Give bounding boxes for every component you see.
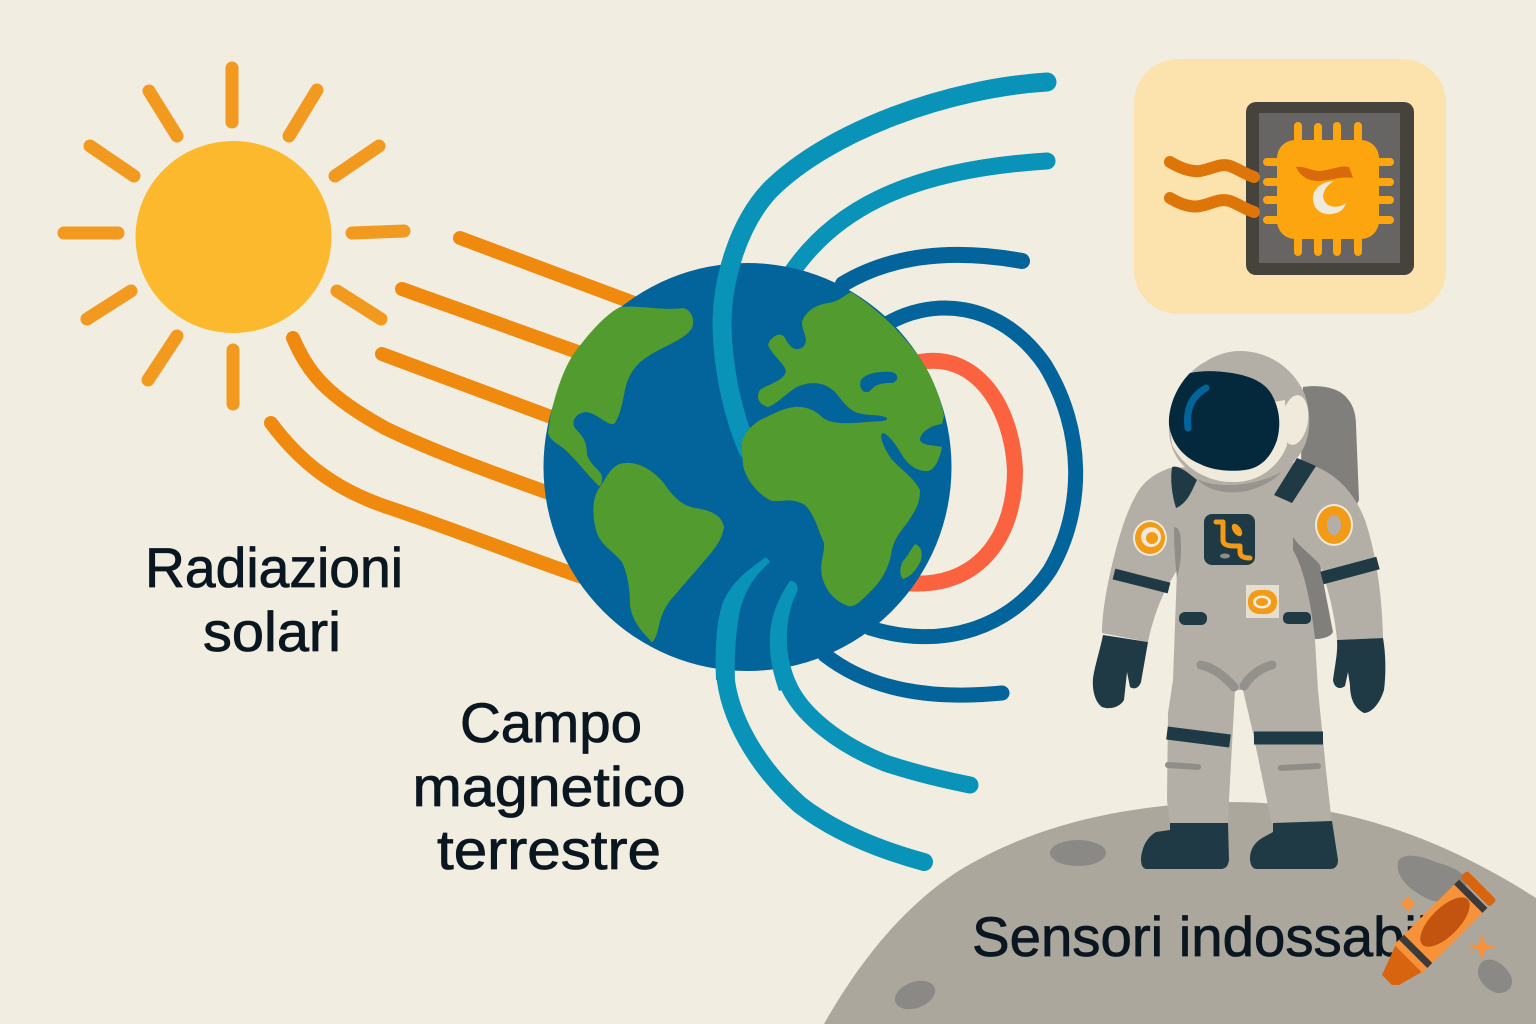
sparkles: [1399, 895, 1417, 913]
chest panel: [1204, 514, 1255, 565]
moon craters: [891, 840, 1512, 1014]
boots: [1141, 821, 1338, 869]
label: Radiazioni solari: solari: [203, 600, 341, 663]
teal field line crossing the globe: [722, 82, 1047, 450]
backpack: [1300, 386, 1359, 560]
globe with continents: [544, 82, 1047, 691]
island: Madagascar: [900, 544, 922, 579]
panel: chip with heat waves: [1134, 59, 1446, 314]
lower teal field lines outside the globe: [725, 672, 970, 862]
gloves: [1093, 635, 1385, 713]
second lower teal field line on the globe: [770, 581, 798, 691]
icon: sun with rays: [64, 68, 404, 404]
knee marks: [1168, 765, 1318, 768]
device frame: [1246, 102, 1414, 275]
collar shadow: [1197, 472, 1282, 492]
label: Radiazioni solari: [145, 536, 403, 663]
magnetic field lines behind the globe: [790, 161, 1076, 695]
shoulder straps: [1171, 467, 1197, 508]
arm bands: [1114, 574, 1169, 588]
moon surface: [824, 802, 1536, 1024]
wave across the chip: [1296, 167, 1353, 181]
helmet side disc: [1279, 393, 1311, 447]
label: Campo magnetico terrestre: magnetico: [412, 755, 686, 818]
visor highlight: [1188, 388, 1206, 428]
heat waves: [1170, 162, 1254, 212]
suit right arm: [1290, 465, 1383, 640]
label: Radiazioni solari: Radiazioni: [145, 536, 403, 599]
suit torso and legs: [1102, 462, 1332, 825]
continent: North America: [548, 307, 693, 486]
label: Campo magnetico terrestre: Campo: [460, 691, 642, 754]
chip body: [1277, 140, 1379, 239]
suit shadow: [1293, 537, 1333, 639]
suit pockets: [1179, 612, 1311, 625]
astronaut: [1093, 351, 1385, 869]
chip pins: [1267, 126, 1390, 252]
continent: Africa and Eurasia: [742, 292, 944, 606]
helmet visor: [1169, 371, 1279, 471]
arm patch right: [1315, 504, 1353, 546]
solar radiation streams: [271, 238, 650, 578]
icon: crayon: [1372, 870, 1497, 995]
chip crescent mark: [1313, 181, 1346, 214]
label: Campo magnetico terrestre: terrestre: [437, 818, 661, 881]
crotch folds: [1201, 665, 1272, 687]
sea: Caspian: [860, 372, 897, 392]
lower teal field line on the globe: [716, 557, 770, 680]
belly patch: [1246, 585, 1279, 618]
helmet: [1169, 351, 1309, 486]
arm patch left: [1133, 520, 1167, 556]
label: Sensori indossabili: Sensori indossabili: [972, 905, 1442, 968]
continent: South America: [593, 463, 724, 642]
leg bands: [1167, 733, 1230, 741]
label: Campo magnetico terrestre: [412, 691, 686, 881]
